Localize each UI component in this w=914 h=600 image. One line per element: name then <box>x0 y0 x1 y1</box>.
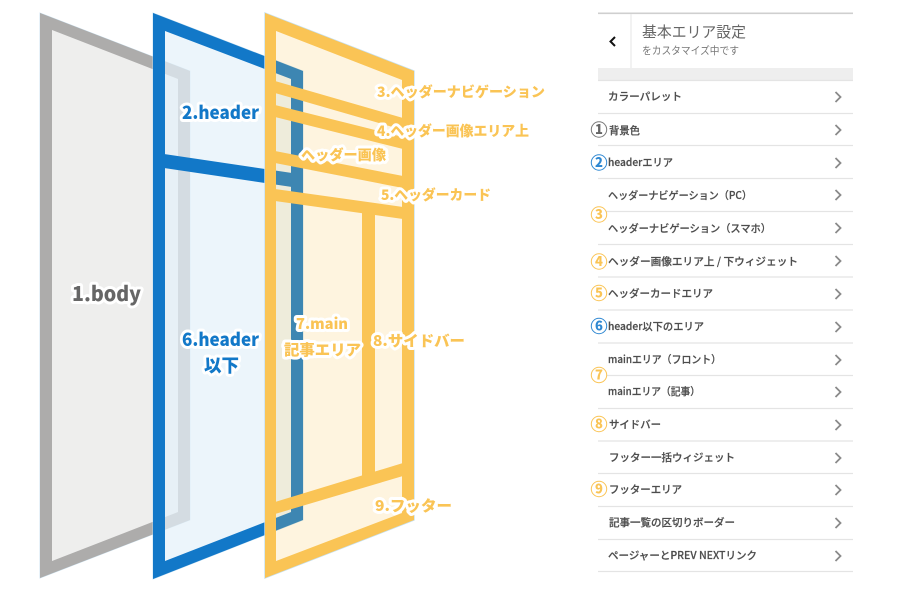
label: 8 sidebar: 8.サイドバー <box>373 330 465 351</box>
row: below header area: header以下のエリア <box>608 319 704 334</box>
label: 以下: 以下 <box>204 352 239 378</box>
row: header area: headerエリア <box>608 155 673 170</box>
icon: back arrow <box>610 37 615 46</box>
badge: 2 <box>591 152 607 171</box>
badge: 9: 9 <box>595 479 603 498</box>
badge: 8: 8 <box>595 414 603 433</box>
badge: 9 <box>591 479 607 498</box>
badge: 4: 4 <box>595 251 603 270</box>
pane: header layer (blue) <box>153 13 303 579</box>
label: 3 header navigation: 3.ヘッダーナビゲーション <box>377 82 545 102</box>
row: header nav PC: ヘッダーナビゲーション（PC） <box>608 188 752 203</box>
label: header image: ヘッダー画像 <box>301 145 386 165</box>
row: footer widget: フッター一括ウィジェット <box>609 450 735 465</box>
row: footer area: フッターエリア <box>609 482 682 497</box>
row: sidebar: サイドバー <box>609 417 661 432</box>
row: color palette: カラーパレット <box>608 89 682 104</box>
row: main article: mainエリア（記事） <box>608 384 700 399</box>
row: pager links: ページャーとPREV NEXTリンク <box>608 548 757 563</box>
label: 4 above header image: 4.ヘッダー画像エリア上 <box>377 121 529 141</box>
row: header nav smartphone: ヘッダーナビゲーション（スマホ） <box>608 221 771 236</box>
label: article area: 記事エリア <box>284 339 361 360</box>
badge: 1 <box>591 119 607 138</box>
label: 2.header: 2.header <box>182 99 260 125</box>
badge: 7: 7 <box>595 365 603 384</box>
row: header image widgets: ヘッダー画像エリア上 / 下ウィジェット <box>608 254 798 269</box>
badge: 5: 5 <box>595 283 603 302</box>
heading: basic area settings: 基本エリア設定 <box>642 24 746 41</box>
badge: 5 <box>591 283 607 302</box>
badge: 6 <box>591 316 607 335</box>
pane: body layer (gray) <box>40 13 190 578</box>
panel: customizer header <box>598 12 853 80</box>
badge: 6: 6 <box>595 316 603 335</box>
label: 7.main: 7.main <box>296 313 348 334</box>
row: main front: mainエリア（フロント） <box>608 352 721 367</box>
badge: 3 <box>591 204 607 223</box>
row: header card area: ヘッダーカードエリア <box>608 286 713 301</box>
badge: 2: 2 <box>595 152 603 171</box>
badge: 1: 1 <box>595 119 603 138</box>
row: background color: 背景色 <box>609 123 640 138</box>
row: article list border: 記事一覧の区切りボーダー <box>609 515 735 530</box>
panel: menu rows <box>591 80 853 572</box>
label: 6.header: 6.header <box>182 326 260 352</box>
label: 5 header card: 5.ヘッダーカード <box>381 185 491 205</box>
label: 9 footer: 9.フッター <box>375 495 452 516</box>
label: 1.body: 1.body <box>72 278 141 307</box>
pane: content layer (orange) <box>265 13 414 578</box>
icons: row chevrons <box>836 92 840 561</box>
badge: 3: 3 <box>595 204 603 223</box>
badge: 4 <box>591 251 607 270</box>
badge: 8 <box>591 414 607 433</box>
subheading: をカスタマイズ中です <box>642 44 739 57</box>
badge: 7 <box>591 365 607 384</box>
